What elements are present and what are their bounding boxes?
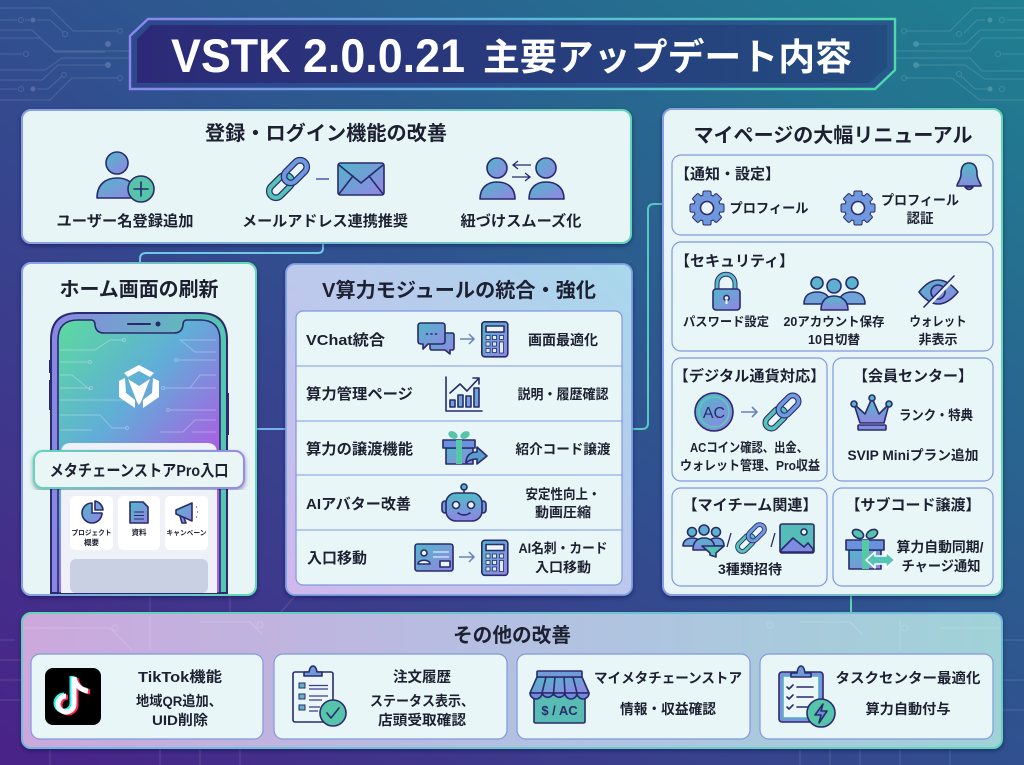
icon: TikTok bbox=[45, 668, 101, 725]
label: SVIP Mini plan: SVIP Miniプラン追加 bbox=[848, 448, 978, 463]
feature table bbox=[296, 311, 622, 585]
label: hide wallet: 非表示 bbox=[918, 332, 958, 347]
title banner bbox=[130, 19, 895, 89]
card: my MetaChain store bbox=[517, 654, 750, 739]
text: my MetaChain store bbox=[594, 670, 742, 717]
label: profile verification: 認証 bbox=[906, 211, 934, 226]
text: TikTok bbox=[136, 668, 223, 728]
text: task center: 算力自動付与 bbox=[866, 701, 950, 717]
label: auto sync and charge notice: 算力自動同期/ bbox=[896, 539, 984, 555]
icon: bell bbox=[957, 163, 981, 190]
heading: other improvements: その他の改善 bbox=[453, 624, 571, 647]
label: profile: プロフィール bbox=[730, 201, 809, 216]
icon: three users bbox=[804, 277, 865, 310]
icon: store: $ / AC bbox=[541, 703, 578, 718]
card: campaign bbox=[165, 496, 208, 550]
section: security bbox=[672, 242, 993, 351]
text: task center: タスクセンター最適化 bbox=[836, 670, 980, 686]
section: my team: 【マイチーム関連】 bbox=[682, 496, 818, 514]
heading: my page: マイページの大幅リニューアル bbox=[694, 124, 972, 147]
section: security: 【セキュリティ】 bbox=[675, 253, 794, 270]
heading: registration and login: 登録・ログイン機能の改善 bbox=[205, 121, 447, 145]
callout: MetaChain Store Pro entry bbox=[34, 451, 244, 488]
panel: other improvements bbox=[22, 613, 1002, 748]
card: campaign: キャンペーン bbox=[166, 529, 206, 537]
card: project overview bbox=[70, 496, 113, 550]
description: AC coin features bbox=[680, 440, 820, 473]
row: AI avatar bbox=[306, 484, 600, 521]
section: my team bbox=[672, 488, 827, 586]
title text: 主要アップデート内容 bbox=[483, 36, 852, 78]
card: project overview: プロジェクト bbox=[72, 528, 112, 537]
label: hide wallet bbox=[910, 314, 966, 347]
connector: my page panel to other improvements bbox=[850, 595, 852, 613]
icon: user add bbox=[97, 152, 154, 202]
heading: V compute module: V算力モジュールの統合・強化 bbox=[322, 279, 596, 302]
card: order history bbox=[274, 654, 507, 739]
icon: store bbox=[530, 671, 589, 723]
label: recommend email link: メールアドレス連携推奨 bbox=[242, 212, 408, 230]
description: AC coin features: ACコイン確認、出金、 bbox=[690, 440, 808, 455]
section: digital currency: 【デジタル通貨対応】 bbox=[674, 367, 826, 385]
section: notifications and settings: 【通知・設定】 bbox=[675, 165, 780, 183]
row: compute transfer: 算力の譲渡機能 bbox=[306, 440, 413, 458]
row: AI avatar: 安定性向上・ bbox=[526, 486, 600, 502]
label: 20 accounts, 10 days: 10日切替 bbox=[808, 332, 861, 347]
icon: lock bbox=[713, 274, 740, 310]
row: AI avatar: 動画圧縮 bbox=[535, 504, 591, 520]
text: order history bbox=[370, 668, 474, 728]
panel: registration and login bbox=[22, 110, 631, 243]
row: AI avatar: AIアバター改善 bbox=[306, 495, 411, 513]
row: entry move: AI名刺・カード bbox=[518, 540, 608, 556]
icon: verification gear bbox=[842, 192, 874, 224]
row: VChat bbox=[306, 322, 598, 357]
icon: hidden eye bbox=[919, 276, 958, 308]
section: notifications and settings bbox=[672, 155, 993, 235]
row: compute management: 説明・履歴確認 bbox=[518, 386, 609, 402]
text: my MetaChain store: 情報・収益確認 bbox=[620, 701, 716, 717]
icon: chain and mail bbox=[267, 158, 384, 200]
phone illustration bbox=[49, 313, 229, 593]
row: entry move bbox=[307, 540, 608, 575]
row: compute transfer bbox=[306, 429, 611, 464]
text: task center bbox=[836, 670, 980, 717]
icon: linked users bbox=[480, 158, 564, 199]
section: member center: 【会員センター】 bbox=[853, 368, 973, 385]
label: 20 accounts, 10 days: 20アカウント保存 bbox=[784, 314, 885, 329]
description: AC coin features: ウォレット管理、Pro収益 bbox=[680, 458, 820, 473]
connector: home panel to V module panel bbox=[256, 428, 286, 430]
card: project overview: 概要 bbox=[84, 537, 99, 547]
callout: MetaChain Store Pro entry: メタチェーンストアPro入口 bbox=[50, 462, 228, 480]
row: compute management bbox=[306, 377, 609, 411]
row: VChat: 画面最適化 bbox=[528, 332, 598, 348]
text: TikTok: UID削除 bbox=[152, 712, 208, 728]
row: entry move: 入口移動 bbox=[307, 550, 367, 567]
card: TikTok bbox=[31, 654, 263, 739]
row: VChat: VChat統合 bbox=[306, 332, 385, 349]
text: order history: 注文履歴 bbox=[393, 668, 451, 686]
text: my MetaChain store: マイメタチェーンストア bbox=[594, 670, 742, 686]
label: profile verification bbox=[881, 193, 959, 226]
row: compute management: 算力管理ページ bbox=[306, 385, 413, 403]
label: add username: ユーザー名登録追加 bbox=[56, 212, 194, 230]
label: profile verification: プロフィール bbox=[881, 193, 959, 208]
panel: my page renewal bbox=[663, 109, 1002, 595]
section: member center bbox=[833, 358, 993, 481]
icon: clipboard with check bbox=[293, 666, 346, 726]
section: sub code transfer bbox=[833, 488, 993, 586]
icon: crown bbox=[851, 395, 892, 430]
label: hide wallet: ウォレット bbox=[910, 314, 966, 329]
panel: home screen refresh bbox=[22, 263, 256, 595]
label: smooth linking: 紐づけスムーズ化 bbox=[460, 212, 582, 230]
label: 3 invitation types: 3種類招待 bbox=[718, 561, 783, 577]
title text: VSTK 2.0.0.21 bbox=[171, 29, 465, 82]
card: materials: 資料 bbox=[132, 527, 147, 537]
label: password setting: パスワード設定 bbox=[683, 315, 769, 329]
label: auto sync and charge notice bbox=[896, 539, 984, 574]
heading: home screen: ホーム画面の刷新 bbox=[60, 278, 218, 301]
section: sub code transfer: 【サブコード譲渡】 bbox=[846, 496, 980, 514]
icon: task clipboard with bolt bbox=[779, 666, 835, 727]
icon: settings gear bbox=[690, 192, 724, 224]
label: auto sync and charge notice: チャージ通知 bbox=[902, 558, 980, 574]
card: materials bbox=[118, 496, 160, 550]
screen circuit lines bbox=[60, 338, 216, 432]
card: task center bbox=[760, 654, 993, 739]
text: TikTok: TikTok機能 bbox=[138, 668, 223, 686]
section: digital currency bbox=[672, 358, 827, 481]
text: order history: 店頭受取確認 bbox=[378, 712, 466, 728]
row: entry move: 入口移動 bbox=[535, 559, 591, 575]
icon: VSTK logo bbox=[119, 365, 159, 408]
icon: team, link and image invites bbox=[683, 523, 814, 557]
panel: V compute module bbox=[286, 264, 632, 595]
label: rank and benefits: ランク・特典 bbox=[899, 407, 973, 423]
icon: AC coin to chain bbox=[695, 393, 801, 431]
icon: AC coin to chain: AC bbox=[703, 405, 725, 422]
text: order history: ステータス表示、 bbox=[370, 693, 474, 709]
label: 20 accounts, 10 days bbox=[784, 314, 885, 347]
connector: V module panel to my page panel bbox=[632, 204, 663, 429]
icon: gift and exchange arrows bbox=[846, 528, 895, 569]
row: compute transfer: 紹介コード譲渡 bbox=[516, 441, 611, 457]
title text bbox=[171, 29, 852, 82]
connector: login panel to home panel bbox=[140, 243, 323, 264]
text: TikTok: 地域QR追加、 bbox=[136, 693, 222, 709]
